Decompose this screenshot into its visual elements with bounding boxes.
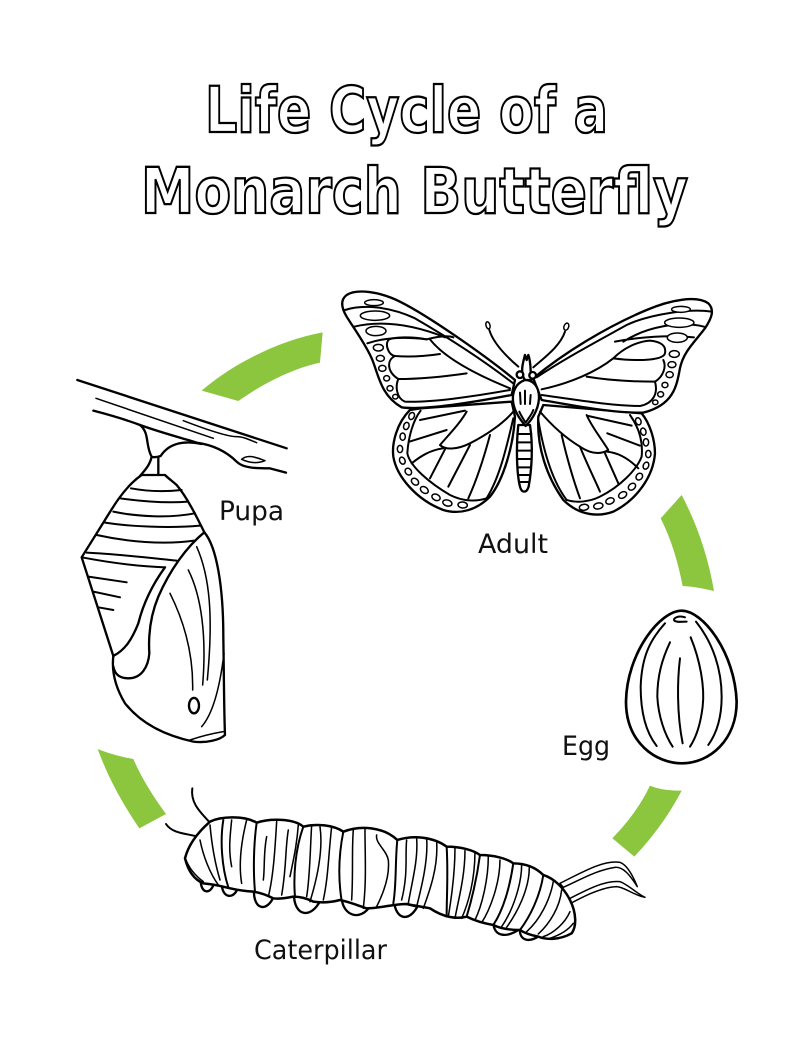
label: adult: Adult [478, 529, 548, 560]
silk stem [140, 425, 202, 476]
egg shell [626, 611, 737, 763]
left forewing [342, 292, 515, 408]
arrow: pupa to adult [202, 332, 323, 401]
body [185, 817, 575, 939]
egg ridges [641, 617, 722, 747]
illustration: adult butterfly [342, 292, 712, 515]
illustration: pupa [77, 380, 287, 742]
label: egg: Egg [562, 731, 610, 762]
right hindwing [538, 405, 655, 515]
title: Monarch Butterfly [141, 155, 688, 228]
arrow: adult to egg [661, 495, 714, 591]
title [141, 74, 688, 228]
arrow: caterpillar to pupa [98, 749, 166, 828]
segment creases [186, 820, 573, 938]
illustration: egg [626, 611, 737, 763]
antennae [485, 321, 570, 367]
wing veins [170, 547, 224, 740]
chrysalis body [82, 475, 225, 742]
right forewing [533, 299, 712, 413]
arrow: egg to caterpillar [612, 786, 682, 857]
wing case [113, 532, 204, 678]
head and thorax [513, 355, 539, 426]
branch [77, 380, 287, 473]
label: pupa: Pupa [219, 496, 284, 527]
left hindwing [393, 402, 515, 512]
chrysalis bands [82, 475, 200, 610]
prolegs [201, 880, 541, 940]
illustration: caterpillar [166, 788, 645, 940]
title: Life Cycle of a [205, 74, 608, 147]
abdomen [517, 425, 532, 492]
antennae [166, 788, 645, 907]
label: caterpillar: Caterpillar [254, 935, 388, 966]
spot [189, 698, 199, 713]
